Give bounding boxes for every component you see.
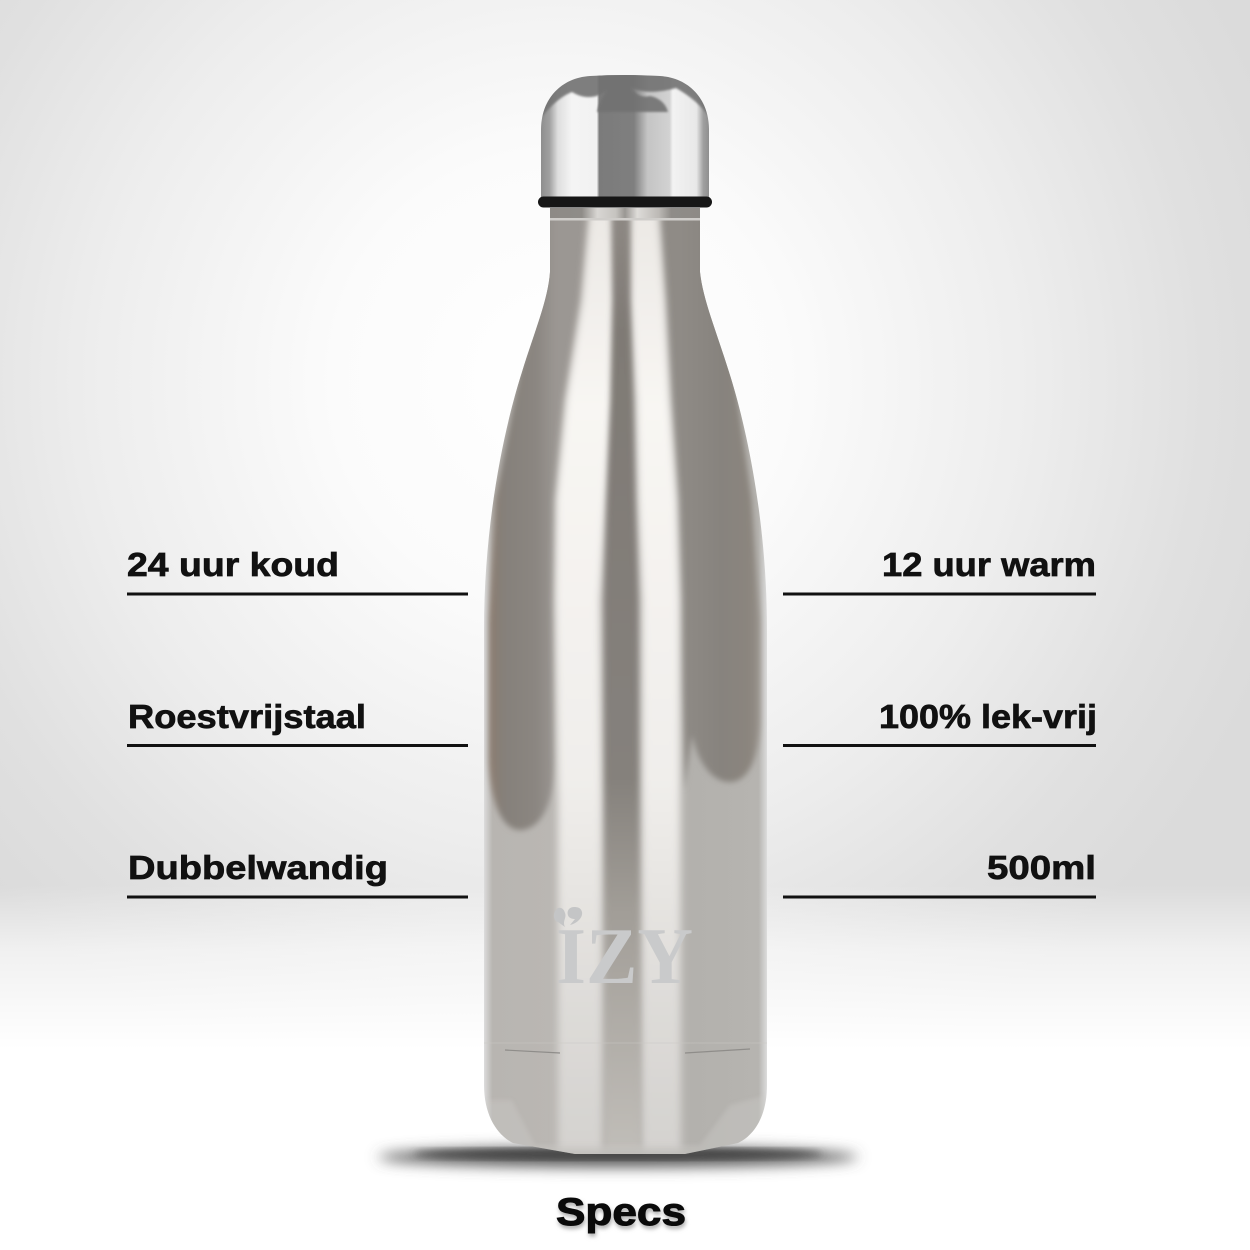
- spec: 100% lek-vrij: [783, 698, 1097, 747]
- spec: 12 uur warm: [783, 546, 1096, 596]
- right dark reflection: [658, 205, 760, 790]
- spec: Dubbelwandig: Dubbelwandig: [128, 849, 388, 886]
- spec: 24 uur koud: [127, 546, 468, 596]
- neck collar: [550, 208, 670, 218]
- steel bottle: [480, 70, 772, 1165]
- title: Specs: Specs: [557, 1194, 687, 1237]
- spec: Dubbelwandig: [127, 849, 468, 898]
- black cap ring: [538, 196, 712, 208]
- logo wordmark: IZY: [556, 913, 693, 1001]
- IZY logo on bottle: [554, 907, 693, 1001]
- right highlight: [630, 205, 681, 1150]
- title: Specs: Specs: [556, 1191, 686, 1234]
- spec: 500ml: [783, 849, 1096, 898]
- spec: Roestvrijstaal: Roestvrijstaal: [128, 698, 366, 735]
- left dark reflection: [489, 205, 592, 830]
- centre dark reflection: [604, 205, 640, 1150]
- spec: 24 uur koud: 24 uur koud: [127, 546, 339, 583]
- left highlight: [555, 205, 614, 1150]
- spec: 100% lek-vrij: 100% lek-vrij: [879, 698, 1097, 735]
- bottle shadow: [378, 1147, 858, 1167]
- cap top scalloped reflection: [542, 75, 708, 118]
- spec: 500ml: 500ml: [987, 849, 1096, 886]
- base groove: [505, 1049, 750, 1053]
- base facets: [492, 1100, 759, 1154]
- spec: 12 uur warm: 12 uur warm: [882, 546, 1096, 583]
- bottle cap: [541, 70, 710, 198]
- logo quote marks: [554, 907, 582, 927]
- bottle body: [480, 205, 772, 1165]
- spec: Roestvrijstaal: [127, 698, 468, 747]
